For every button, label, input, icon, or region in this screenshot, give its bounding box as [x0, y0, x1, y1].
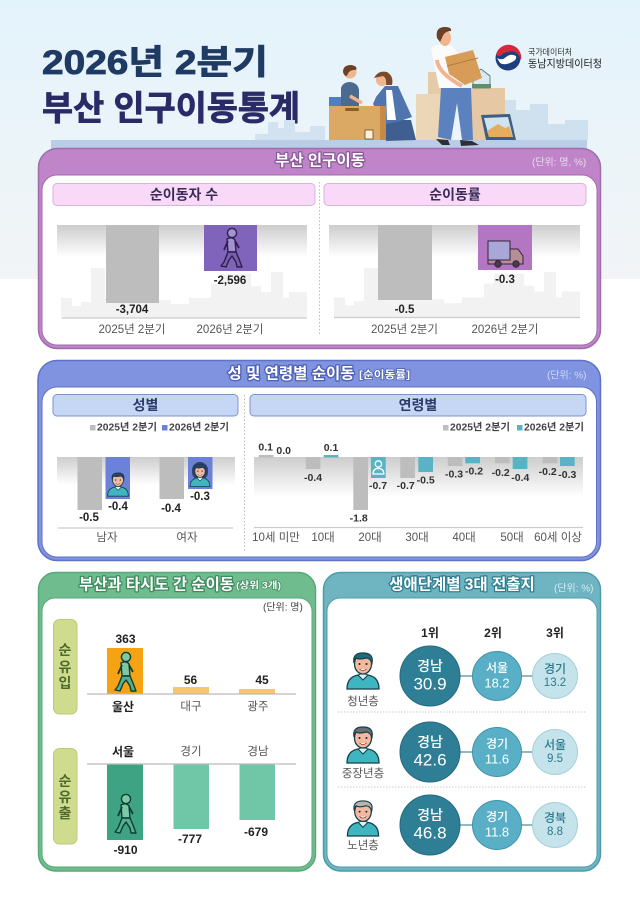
row: 노년층: 경남 [417, 807, 443, 823]
heading note: 상위 3개: (상위 3개) [236, 580, 281, 592]
legend: 연령별: 2025년 2분기 [450, 420, 510, 434]
sub heading: 순이동률 [324, 184, 586, 206]
chart: 순유출: -679 [244, 825, 268, 839]
woman [386, 120, 416, 141]
label: 순유출: 유 [59, 789, 72, 805]
chart: 연령별: 20대 [358, 531, 382, 544]
chart: 연령별: 50대 [500, 531, 524, 544]
chart: 순이동률 [329, 225, 580, 336]
chart: 연령별: 30대 [405, 531, 429, 544]
label: 순유출: 출 [59, 805, 72, 821]
unit note: (단위: 명, %) [532, 156, 586, 168]
row: 노년층: 46.8 [413, 824, 447, 842]
unit note: (단위: %) [547, 368, 587, 382]
row: 노년층: 노년층 [347, 839, 379, 852]
legend: 성별: 2026년 2분기 [169, 420, 229, 434]
icon: walking person [221, 228, 242, 267]
chart: 순유출 [87, 744, 296, 857]
heading: 생애단계별 3대 전출지: 생애단계별 3대 전출지 [389, 576, 535, 594]
title: 2026년 2분기 [42, 44, 268, 82]
row: 중장년층 [342, 722, 578, 782]
row: 청년층: 경남 [417, 658, 443, 674]
row: 중장년층: 중장년층 [342, 767, 384, 780]
sub heading: 순이동자 수: 순이동자 수 [150, 186, 218, 202]
illustration: family moving boxes [51, 27, 588, 149]
chart: 순이동자 수 [57, 225, 307, 336]
logo: 국가데이터처 동남지방데이터청: 국가데이터처 [528, 47, 572, 57]
chart: 연령별: -0.3 [445, 468, 463, 480]
label: 순유입: 유 [59, 659, 72, 675]
row: 노년층: 8.8 [547, 826, 563, 838]
chart: 순유입: 광주 [247, 700, 269, 713]
row: 청년층: 30.9 [413, 674, 447, 694]
row: 노년층: 11.8 [485, 824, 509, 840]
chart: 순이동률: 2026년 2분기 [472, 323, 538, 336]
row: 청년층: 13.2 [544, 677, 566, 689]
heading: 성 및 연령별 순이동: 성 및 연령별 순이동 [228, 364, 354, 382]
row: 노년층 [347, 795, 578, 855]
sub heading: 성별: 성별 [133, 397, 158, 413]
chart: 순유입: 대구 [180, 700, 202, 713]
icon: young adult [347, 653, 379, 689]
chart: 순유출: 경남 [247, 744, 269, 758]
chart: 성별: -0.3 [190, 491, 210, 503]
unit note: (단위: %) [554, 582, 594, 594]
chart: 연령별: 10세 미만 [252, 531, 300, 544]
chart: 연령별: -0.3 [558, 469, 577, 481]
label: 순유입: 순 [59, 642, 72, 658]
legend: 연령별 [443, 420, 584, 434]
title [42, 44, 300, 128]
legend: 성별: 2025년 2분기 [97, 420, 157, 434]
panel: 부산 인구이동 [38, 148, 600, 348]
row: 청년층: 18.2 [484, 676, 510, 690]
sub heading: 연령별: 연령별 [399, 397, 437, 413]
chart: 순유출: 경기 [180, 744, 202, 758]
panel: 부산과 타시도 간 순이동 [38, 572, 316, 871]
label: 순유입: 입 [59, 675, 71, 691]
label: 순유출: 순 [59, 773, 72, 789]
icon: person outline [373, 461, 384, 474]
icon: senior [347, 801, 379, 836]
chart: 순이동률: 2025년 2분기 [371, 323, 438, 336]
legend: 성별 [90, 420, 229, 434]
chart: 연령별: 0.0 [276, 445, 291, 457]
sub heading: 연령별 [250, 394, 586, 416]
label: 순유입 [54, 620, 77, 714]
icon: man [108, 473, 128, 496]
chart: 성별: 남자 [96, 531, 118, 544]
row: 노년층: 경북 [544, 811, 566, 825]
row: 중장년층: 서울 [544, 738, 566, 752]
icon: middle-aged adult [347, 727, 379, 763]
rank headers: 1위 [421, 626, 439, 640]
chart: 성별 [57, 457, 235, 544]
row: 중장년층: 경기 [486, 737, 508, 751]
panel: 생애단계별 3대 전출지 [324, 572, 600, 871]
legend: 연령별: 2026년 2분기 [524, 420, 584, 434]
sub heading: 순이동률: 순이동률 [429, 186, 481, 202]
chart: 순유입: 45 [255, 673, 269, 687]
chart: 순유출: -910 [113, 843, 138, 857]
row: 청년층: 서울 [486, 661, 508, 675]
chart: 순이동자 수: 2025년 2분기 [99, 323, 165, 336]
front box [329, 106, 386, 140]
chart: 순이동자 수: -2,596 [214, 275, 246, 287]
chart: 연령별 [252, 441, 583, 544]
row: 중장년층: 42.6 [413, 750, 447, 770]
chart: 순이동자 수: 2026년 2분기 [197, 323, 263, 336]
picture frame [481, 114, 516, 140]
row: 노년층: 경기 [486, 810, 508, 824]
chart: 연령별: 0.1 [324, 442, 338, 454]
chart: 연령별: -0.5 [417, 475, 435, 487]
kid [341, 82, 359, 106]
icon: walking person [115, 652, 136, 691]
rank headers: 2위 [484, 626, 502, 640]
chart: 성별: -0.5 [79, 512, 100, 524]
chart: 연령별: -0.2 [465, 465, 483, 477]
icon: truck [488, 241, 523, 267]
unit note: (단위: 명) [263, 600, 303, 614]
sub heading: 순이동자 수 [53, 184, 315, 206]
heading note: 순이동률: [순이동률] [359, 368, 410, 381]
row: 중장년층: 9.5 [547, 753, 563, 765]
chart: 순유입: 56 [184, 673, 197, 687]
chart: 연령별: -1.8 [350, 512, 368, 524]
chart: 순이동률: -0.5 [395, 304, 415, 316]
chart: 연령별: 10대 [311, 531, 335, 544]
rank headers: 3위 [546, 626, 564, 640]
chart: 연령별: -0.7 [369, 480, 387, 492]
chart: 연령별: -0.4 [304, 472, 322, 484]
title: 부산 인구이동통계 [42, 90, 300, 128]
man [438, 88, 473, 140]
chart: 연령별: -0.4 [511, 472, 530, 484]
chart: 순유출: -777 [178, 832, 202, 846]
label: 순유출 [54, 748, 77, 844]
heading: 부산과 타시도 간 순이동: 부산과 타시도 간 순이동 [79, 576, 234, 594]
logo: 국가데이터처 동남지방데이터청: 동남지방데이터청 [528, 58, 602, 70]
chart: 순이동률: -0.3 [495, 274, 515, 286]
chart: 연령별: 60세 이상 [534, 531, 582, 544]
row: 청년층: 청년층 [347, 695, 379, 708]
chart: 순유입: 울산 [112, 700, 134, 714]
chart: 연령별: 40대 [452, 531, 476, 544]
chart: 연령별: 0.1 [258, 441, 273, 453]
chart: 성별: -0.4 [108, 501, 129, 513]
rank headers [421, 626, 564, 640]
chart: 성별: 여자 [176, 531, 198, 544]
sub heading: 성별 [53, 394, 238, 416]
row: 중장년층: 11.6 [485, 752, 509, 766]
icon: woman [190, 462, 210, 487]
chart: 순이동자 수: -3,704 [116, 304, 149, 316]
panel: 성 및 연령별 순이동 [38, 360, 600, 560]
row: 청년층 [347, 646, 578, 708]
heading: 부산 인구이동: 부산 인구이동 [275, 152, 365, 170]
chart: 성별: -0.4 [161, 503, 182, 515]
chart: 연령별: -0.2 [539, 466, 557, 478]
icon: walking person [115, 794, 136, 833]
chart: 순유출: 서울 [112, 745, 134, 759]
chart: 순유입 [87, 632, 296, 714]
chart: 연령별: -0.7 [397, 480, 415, 492]
chart: 순유입: 363 [115, 632, 136, 646]
background [0, 0, 640, 279]
logo: 국가데이터처 동남지방데이터청 [496, 45, 602, 70]
row: 중장년층: 경남 [417, 734, 443, 750]
row: 청년층: 경기 [544, 662, 566, 676]
chart: 연령별: -0.2 [492, 467, 510, 479]
